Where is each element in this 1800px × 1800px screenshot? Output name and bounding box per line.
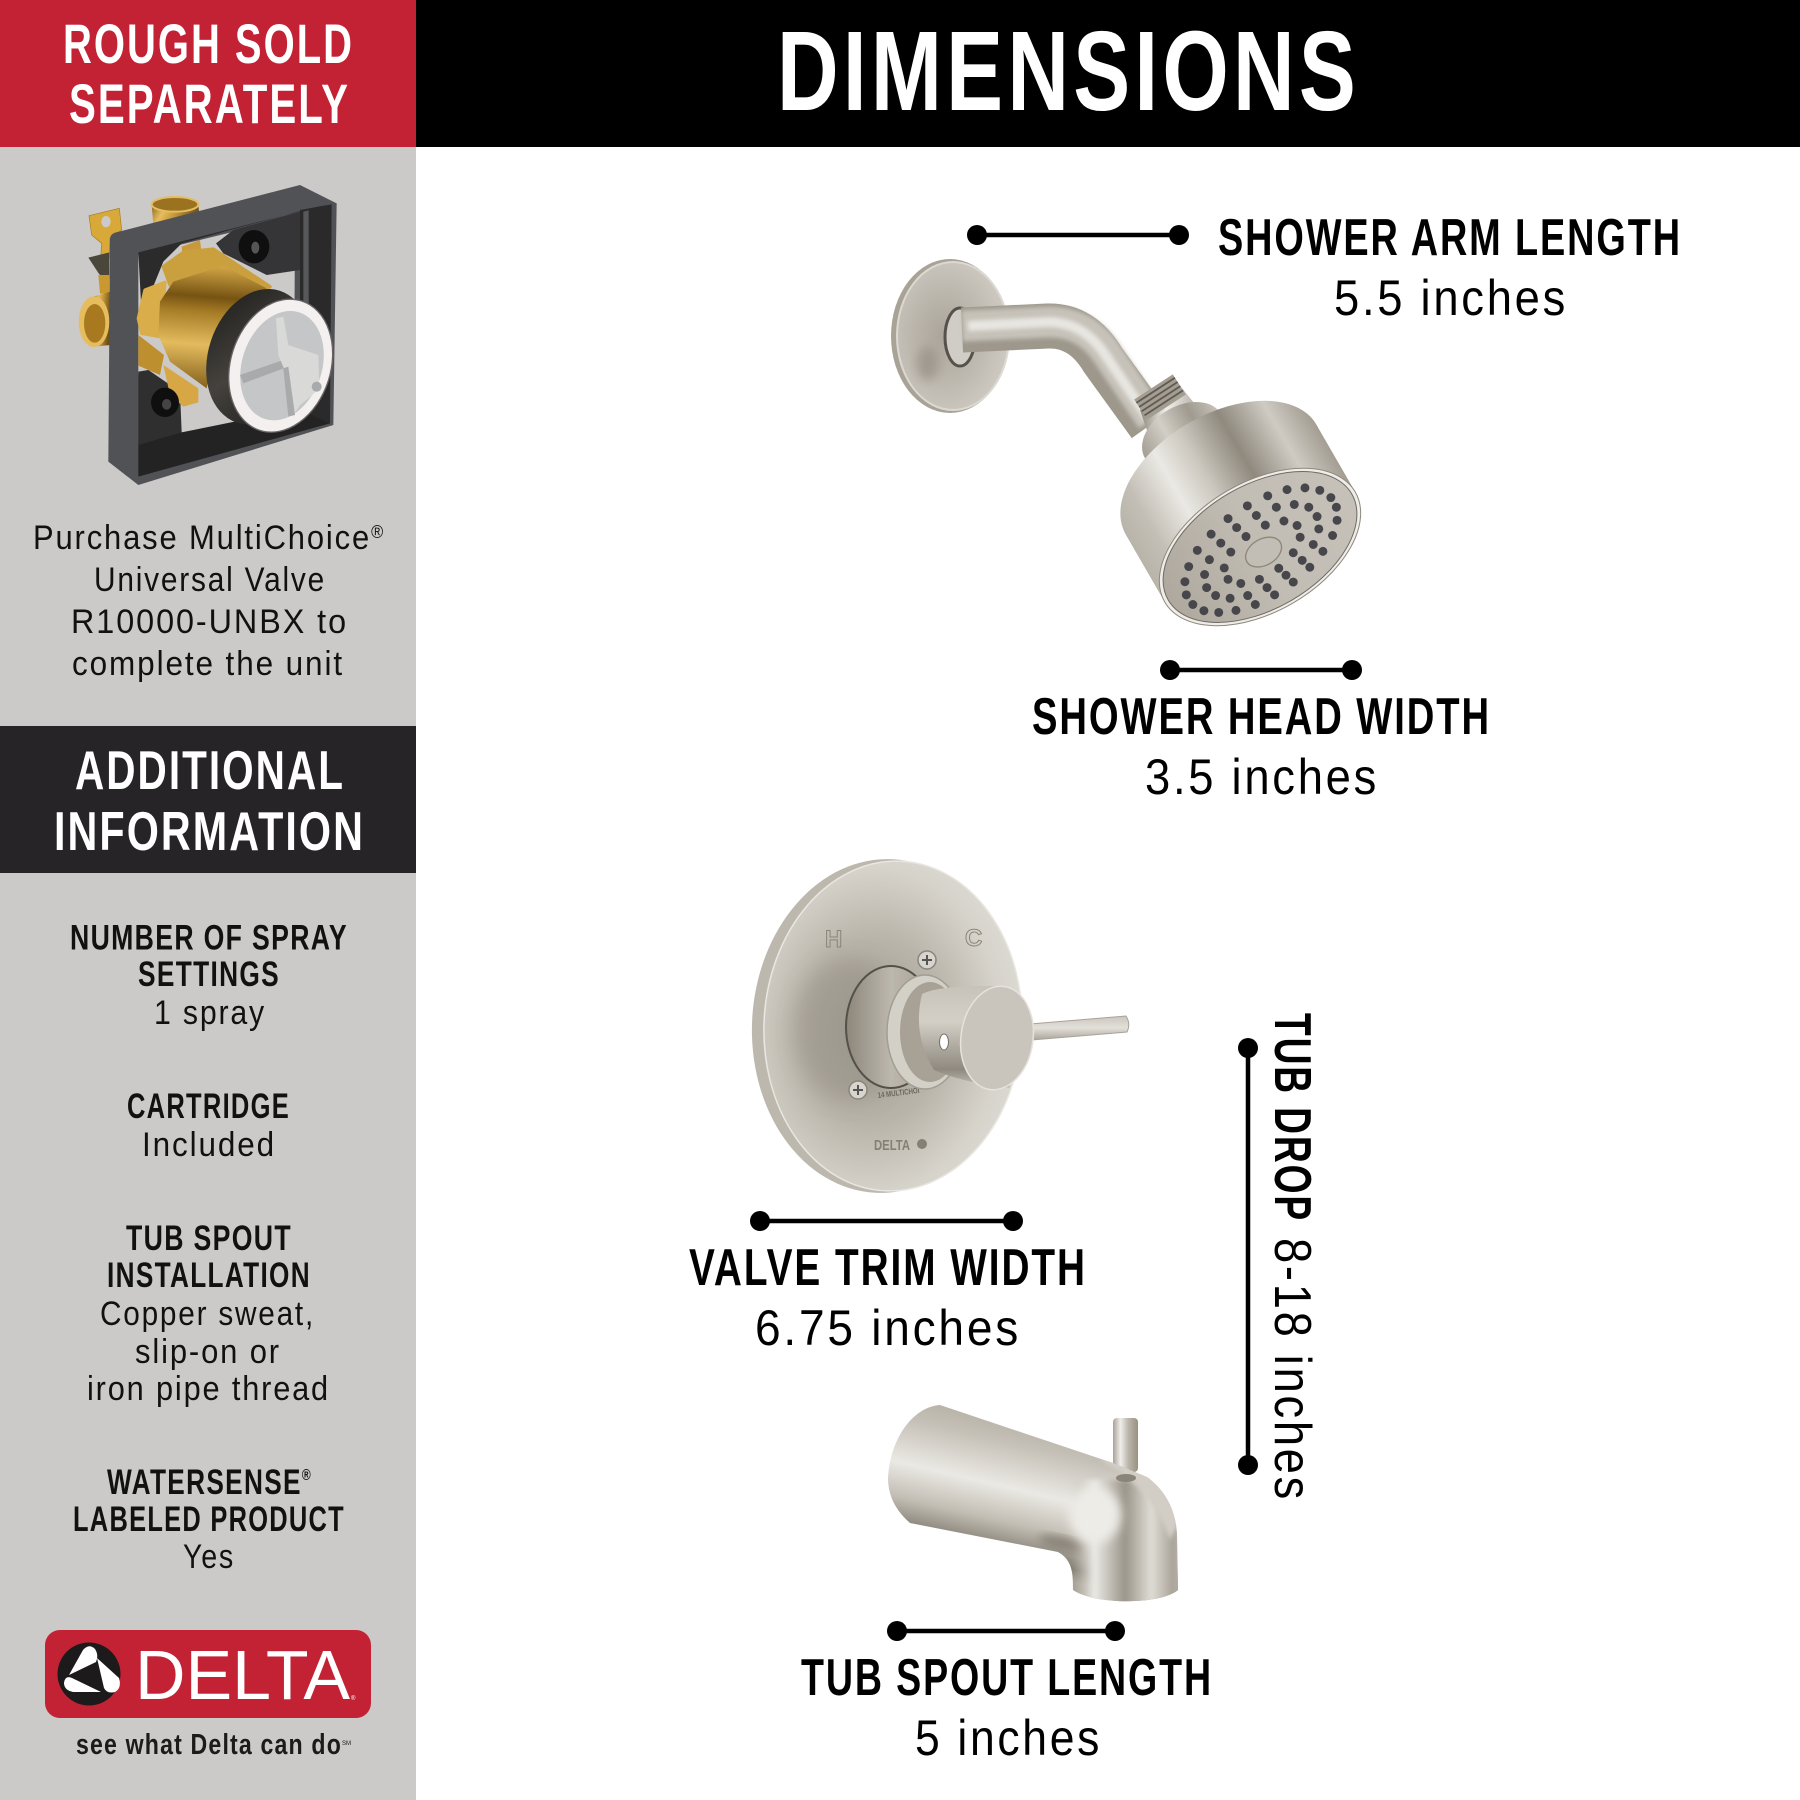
logo: delta [45,1630,371,1718]
spec: number of spray settings [70,918,348,1032]
dimension: valve trim width: 6.75 inches [755,1300,1021,1356]
screws [849,951,936,1099]
spec: watersense labeled product [73,1463,345,1576]
spec: cartridge [127,1087,290,1164]
measure bar [1238,1038,1258,1475]
arm [962,322,1152,425]
lever [1030,1016,1129,1040]
hot and cold markings: H [825,926,842,953]
text block: purchase universal valve: Universal Valve [94,561,326,599]
spec: number of spray settings: SETTINGS [138,955,280,994]
dimension: shower arm length: 5.5 inches [1334,270,1568,326]
grey cap [227,300,337,431]
text block: purchase universal valve: complete the unit [72,645,344,683]
spec: tub spout installation: INSTALLATION [107,1256,311,1295]
text block: purchase universal valve: ® [371,522,385,542]
heading: additional information: ADDITIONAL [75,739,345,801]
text block: purchase universal valve: R10000-UNBX to [71,603,348,641]
knob [919,986,1010,1088]
spec: watersense labeled product: Yes [183,1538,235,1576]
tagline: see what delta can do: SM [342,1741,351,1747]
dimension: tub spout length: 5 inches [915,1710,1102,1766]
plate [743,852,1030,1200]
title banner: dimensions: DIMENSIONS [777,8,1360,134]
image: shower head and arm [891,259,1388,658]
head cylinder [1093,368,1388,658]
heading: additional information [0,726,416,873]
embossed brand: DELTA [874,1137,910,1154]
banner: rough sold separately: ROUGH SOLD [63,12,354,75]
flange [891,259,1009,413]
back plates [216,212,300,275]
spec: watersense labeled product: LABELED PRODUCT [73,1500,345,1539]
silver ring [212,286,349,446]
spec: tub spout installation: Copper sweat, [100,1295,315,1333]
embossed brand [874,1086,927,1154]
tagline: see what delta can do: see what Delta can do [76,1729,342,1761]
logo: delta: DELTA [135,1636,350,1714]
embossed brand: 14 MULTICHOI [877,1086,920,1100]
spec: tub spout installation: iron pipe thread [87,1370,330,1408]
dimension: valve trim width [689,1211,1087,1356]
spec: cartridge: Included [142,1126,276,1164]
banner: rough sold separately: SEPARATELY [69,72,350,135]
frame interior walls [138,203,332,315]
text block: purchase universal valve [33,519,385,683]
dimension: shower head width: SHOWER HEAD WIDTH [1032,688,1491,746]
threaded section [1134,374,1186,420]
image: valve trim [743,852,1129,1200]
frame outer [108,185,337,485]
logo: delta: ® [351,1695,356,1702]
neck [1140,388,1206,445]
measure bar [750,1211,1023,1231]
spout body [888,1405,1178,1602]
left pipe [93,292,111,347]
fittings [239,230,269,263]
cap band [189,275,327,438]
spec: number of spray settings: NUMBER OF SPRAY [70,918,348,958]
spec: watersense labeled product: ® [302,1467,312,1484]
image: valve trim: C [965,925,982,952]
measure bar [887,1621,1125,1641]
top pipe [152,205,199,225]
dimension: shower head width: 3.5 inches [1145,749,1379,805]
diverter knob [1113,1418,1138,1480]
spec: tub spout installation: TUB SPOUT [126,1219,292,1258]
collar [887,975,963,1089]
hub [846,966,936,1088]
dimension: tub drop: 8-18 inches [1263,1238,1321,1502]
dimension: tub spout length [801,1621,1213,1766]
brass body [182,240,203,263]
title banner: dimensions [416,0,1800,147]
measure bar [967,225,1189,245]
panel: left sidebar [0,0,416,1800]
head face [1132,436,1388,658]
spec: tub spout installation [87,1219,330,1408]
back window [138,217,295,432]
collar [1130,388,1236,484]
banner: rough sold separately [0,0,416,147]
image: tub spout [888,1405,1178,1602]
spray nozzles [1180,483,1342,617]
mounting bracket [89,208,122,258]
spec: watersense labeled product: WATERSENSE [107,1463,367,1502]
dimension: tub drop: TUB DROP [1263,1013,1321,1222]
dimension: valve trim width: VALVE TRIM WIDTH [689,1239,1087,1297]
dimension: tub spout length: TUB SPOUT LENGTH [801,1649,1213,1707]
dimension: tub drop [1238,1013,1321,1502]
spec: tub spout installation: slip-on or [135,1333,281,1371]
spec: cartridge: CARTRIDGE [127,1087,290,1126]
spec: number of spray settings: 1 spray [154,994,266,1032]
text block: purchase universal valve: Purchase MultiChoice [33,519,405,557]
dimension: shower arm length [967,209,1682,326]
dimension: shower head width [1032,660,1491,805]
measure bar [1160,660,1362,680]
icon: delta triangle mark [58,1642,120,1706]
heading: additional information: INFORMATION [54,800,365,862]
image: rough-in valve [79,185,349,485]
